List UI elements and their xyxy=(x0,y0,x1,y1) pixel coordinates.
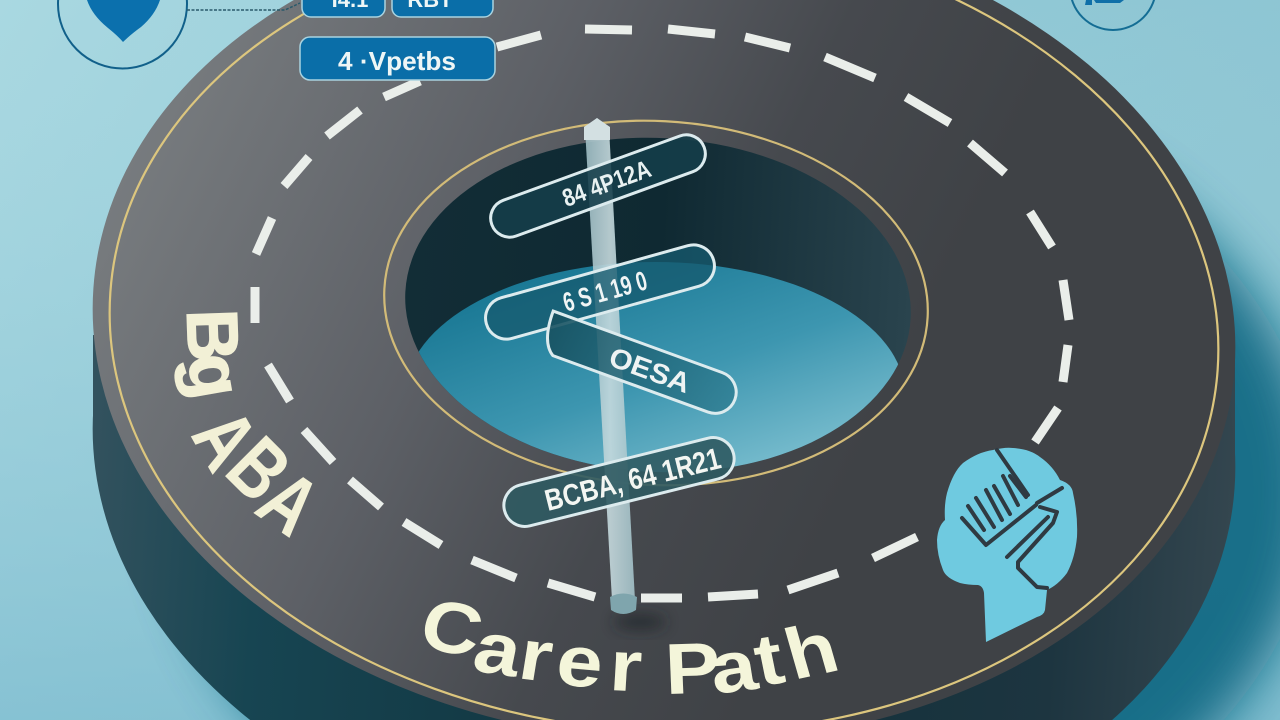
sign 2: 6 S 1 19 0 xyxy=(560,266,651,318)
post shadow xyxy=(614,613,666,631)
button: 4 years xyxy=(300,37,495,80)
sign 3 xyxy=(539,311,742,419)
sign 3: OESA xyxy=(605,341,695,399)
top-right badge xyxy=(1070,0,1156,30)
button: left xyxy=(302,0,385,17)
signpost xyxy=(481,118,742,631)
inner gold line xyxy=(375,107,937,499)
head icon xyxy=(937,448,1077,642)
sign 4: BCBA, 64 1R21 xyxy=(542,442,724,518)
road lettering: Bg: Bg xyxy=(171,308,258,404)
hole wall xyxy=(397,125,919,485)
post cap xyxy=(584,118,610,140)
badge ring xyxy=(1070,0,1156,30)
top-left heart badge xyxy=(58,0,300,68)
button: 4 years: 4 ·Vpetbs xyxy=(338,46,456,76)
sign 2 xyxy=(481,240,719,344)
sign 4 xyxy=(499,433,739,531)
button: right xyxy=(392,0,493,17)
connector line xyxy=(187,3,300,10)
brain and hand lines xyxy=(962,450,1062,588)
top buttons xyxy=(300,0,495,80)
hole floor xyxy=(418,262,898,472)
sign 1: 84 4P12A xyxy=(559,155,655,213)
disc shadow xyxy=(173,70,1280,720)
centre hole xyxy=(405,138,911,472)
dashed centre line xyxy=(255,29,1069,598)
sign 1 xyxy=(485,129,711,243)
icon fragment xyxy=(1085,0,1124,5)
icon: heart xyxy=(87,0,160,42)
road lettering: ABA: ABA xyxy=(167,380,346,560)
post xyxy=(585,118,635,600)
badge ring xyxy=(58,0,187,68)
head silhouette xyxy=(937,448,1077,642)
post base xyxy=(610,594,637,614)
